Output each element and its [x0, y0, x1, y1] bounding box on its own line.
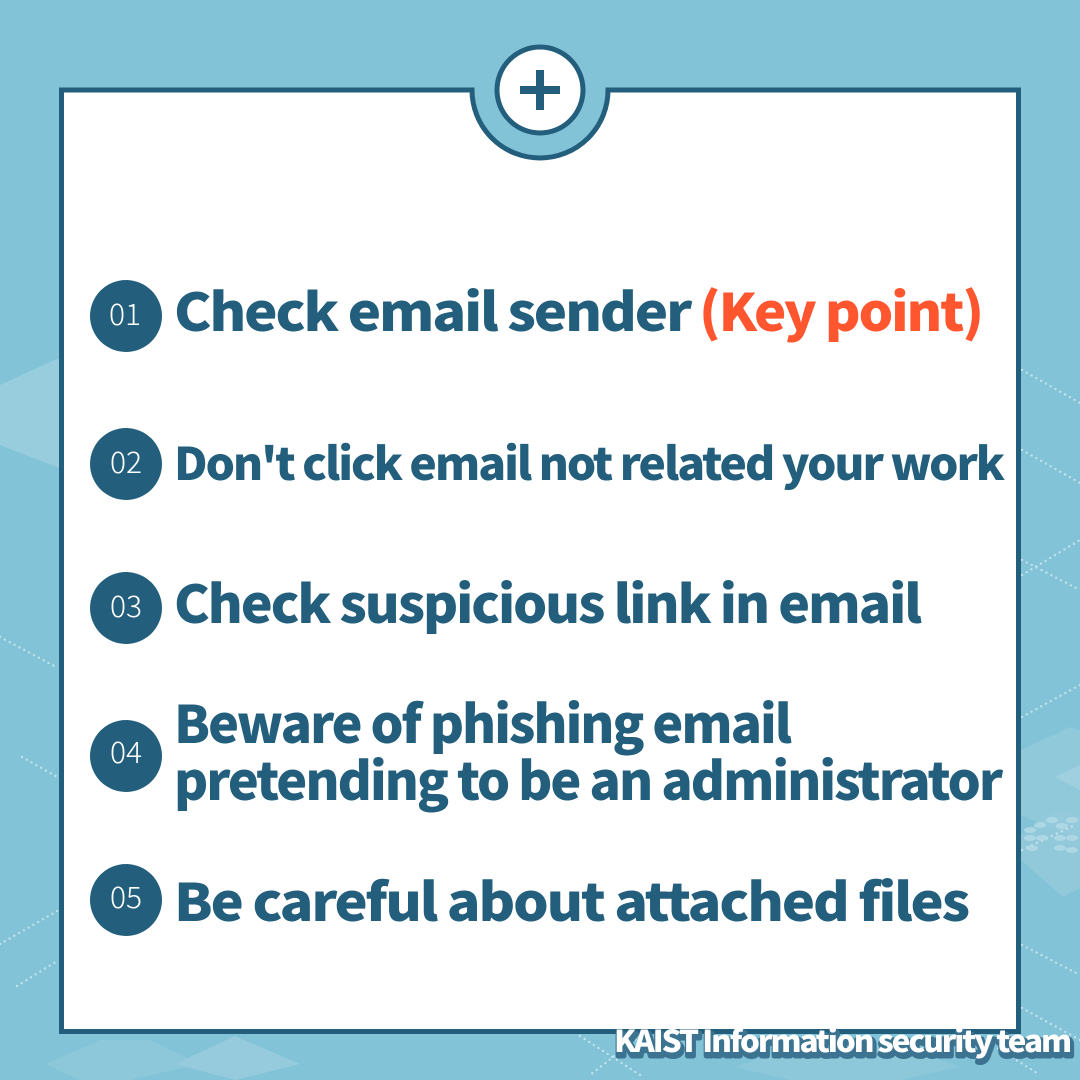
item 02: [90, 428, 1006, 500]
item 05 text: Be careful about attached files: [174, 861, 969, 936]
number badge 03: [90, 572, 162, 644]
footer credit: KAIST Information security team: [616, 1021, 1072, 1065]
item 04 text: [174, 683, 1004, 815]
number badge 02: 02: [110, 438, 142, 482]
number badge 05: [90, 864, 162, 936]
number badge 04: 04: [110, 728, 142, 772]
number badge 03: 03: [110, 582, 142, 626]
icon: plus badge: [497, 47, 583, 133]
number badge 05: 05: [110, 873, 142, 917]
item 01: [90, 271, 982, 352]
item 05: [90, 861, 969, 936]
white panel frame with notch: [62, 90, 1018, 1032]
item 04 text: Beware of phishing email: [174, 683, 792, 758]
item 03: [90, 563, 922, 644]
key point highlight: (Key point): [699, 271, 982, 346]
item 03 text: Check suspicious link in email: [174, 563, 922, 638]
number badge 01: 01: [109, 290, 141, 334]
item 04 text: pretending to be an administrator: [174, 740, 1004, 815]
footer credit: KAIST Information security team: [614, 1017, 1070, 1061]
item 04: [90, 683, 1004, 815]
number badge 02: [90, 428, 162, 500]
item 01 text: Check email sender: [174, 271, 693, 346]
number badge 04: [90, 720, 162, 792]
number badge 01: [90, 280, 162, 352]
item 02 text: Don't click email not related your work: [174, 428, 1006, 493]
